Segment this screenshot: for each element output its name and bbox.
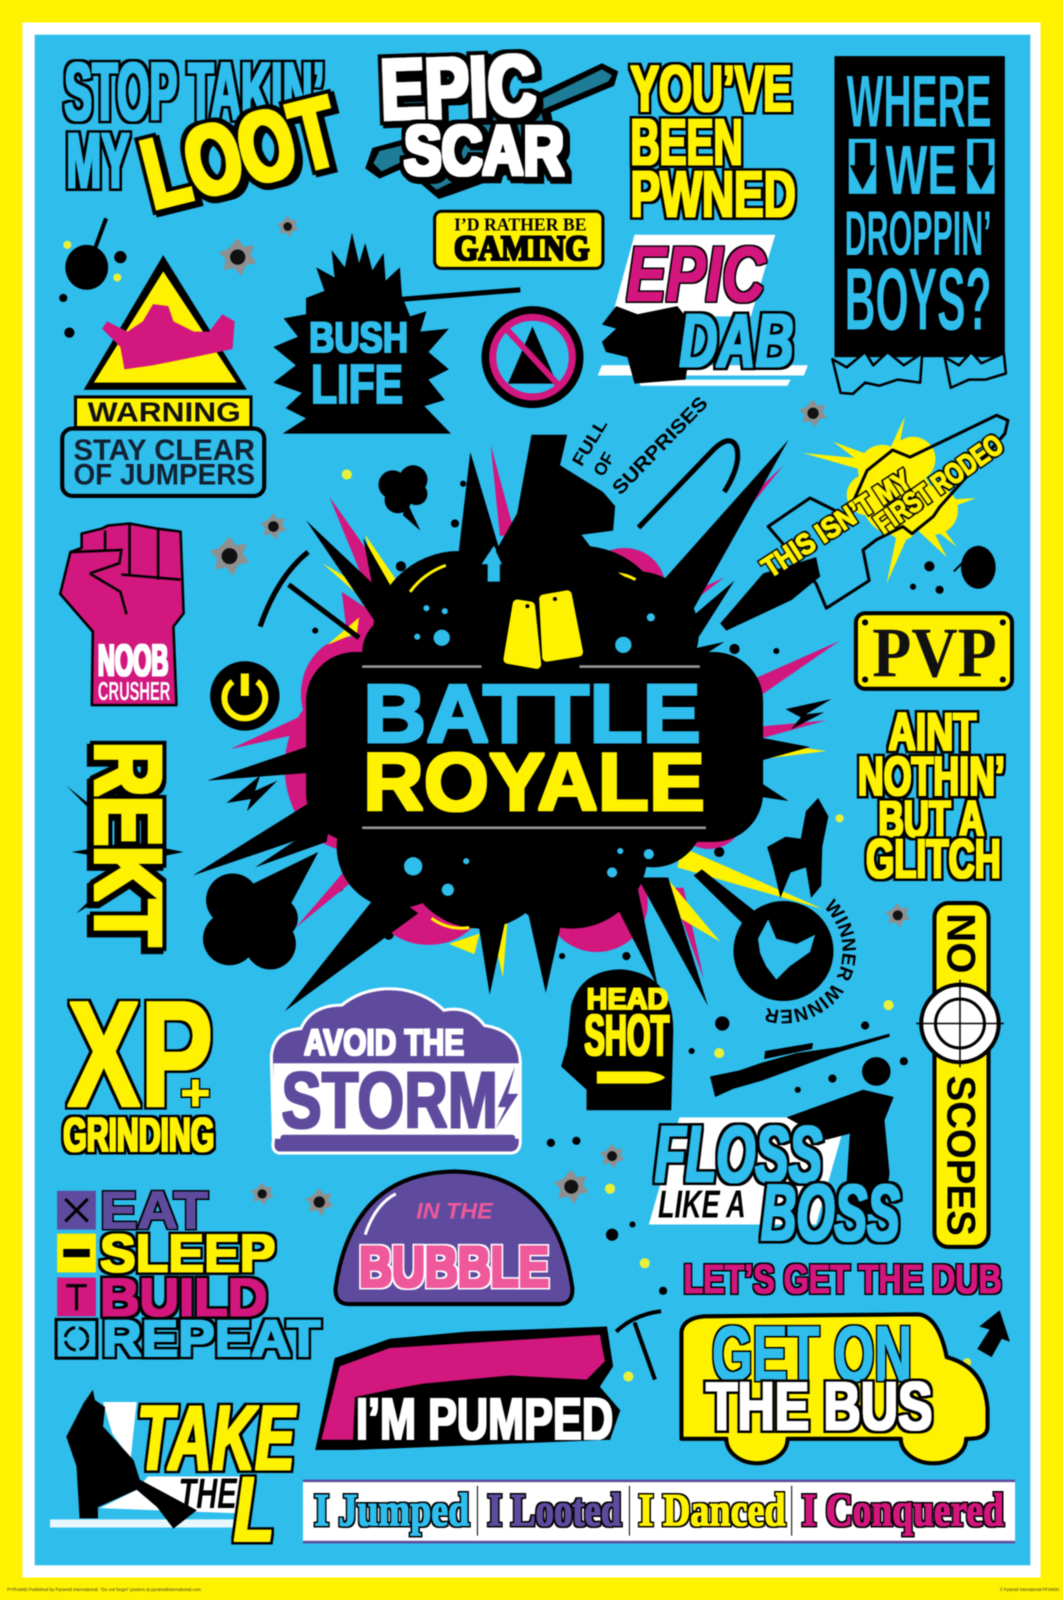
yellow rays xyxy=(322,535,826,978)
text: FULL: FULL xyxy=(568,415,611,469)
yellow splash xyxy=(803,416,976,584)
black cloud xyxy=(306,546,763,929)
warning label xyxy=(75,397,251,428)
winner winner arc path xyxy=(765,907,843,1010)
icon: sniper rifle xyxy=(710,1034,890,1097)
i'm pumped xyxy=(315,1327,620,1452)
rekt xyxy=(66,742,184,946)
purple rule top xyxy=(303,1480,1015,1482)
row: build: BUILD xyxy=(100,1268,267,1327)
text: LIKE A: LIKE A xyxy=(658,1183,746,1226)
icon: flossing silhouette xyxy=(787,1057,894,1214)
text: CRUSHER: CRUSHER xyxy=(98,678,170,706)
icon: scar rifle xyxy=(365,63,618,199)
title rule bottom xyxy=(362,827,706,829)
text: FIRST RODEO: FIRST RODEO xyxy=(869,429,1009,540)
white backdrop xyxy=(649,1117,847,1224)
sign: pvp xyxy=(856,613,1012,693)
text: SCAR: SCAR xyxy=(404,111,564,189)
text: I Jumped: I Jumped xyxy=(314,1485,469,1537)
purple rule bottom xyxy=(303,1541,1015,1543)
handle xyxy=(694,869,755,923)
icon: skydiver xyxy=(102,304,235,369)
central explosion xyxy=(193,440,840,1011)
text: HEAD: HEAD xyxy=(587,983,668,1016)
icon: jumpers xyxy=(832,352,1006,394)
icon: grenade xyxy=(954,546,996,589)
text: IN THE: IN THE xyxy=(416,1198,494,1223)
warning triangle xyxy=(84,255,247,390)
row: sleep: SLEEP xyxy=(100,1224,275,1283)
white backdrop xyxy=(103,1402,137,1459)
icon: no tent sign xyxy=(482,306,584,408)
warning sign: stay clear of jumpers xyxy=(62,255,264,496)
text: STORM: STORM xyxy=(282,1056,498,1145)
text: I'M PUMPED: I’M PUMPED xyxy=(356,1387,613,1452)
yellow arcs xyxy=(410,565,636,928)
text: I Conquered: I Conquered xyxy=(802,1485,1004,1537)
text: LOOT: LOOT xyxy=(131,75,348,230)
text: full of surprises xyxy=(568,392,712,499)
text: +: + xyxy=(181,1064,210,1121)
strip: i jumped i looted i danced i conquered xyxy=(303,1480,1015,1543)
text: SCOPES: SCOPES xyxy=(939,1076,983,1236)
text: STOP TAKIN': STOP TAKIN’ xyxy=(64,46,324,137)
icon: bush silhouette xyxy=(273,233,451,434)
icon: pickaxe left xyxy=(260,552,359,638)
icon: crowbar xyxy=(639,441,738,528)
black spikes xyxy=(193,440,810,1011)
no scopes bar xyxy=(916,903,1004,1247)
bush life xyxy=(273,233,520,434)
icon: scope xyxy=(916,980,1004,1067)
text: WINNER WINNER: WINNER WINNER xyxy=(764,898,857,1024)
highlight xyxy=(365,1194,396,1235)
footer small print xyxy=(7,1587,1060,1592)
bar xyxy=(934,903,989,1247)
epic scar sticker xyxy=(365,37,618,199)
headline: stop takin my loot xyxy=(64,46,348,230)
white strip xyxy=(303,1481,1015,1542)
text: THIS ISN'T MY: THIS ISN’T MY xyxy=(757,464,918,584)
icon: arrow lower right xyxy=(977,1310,1010,1357)
icon: pickaxe lower right xyxy=(616,1311,661,1380)
text: publisher: PYRAMID Published by Pyramid International. "Do not forget" posters at pyramidinternational.com xyxy=(7,1587,202,1592)
text: EPIC: EPIC xyxy=(379,37,537,138)
text: GAMING: GAMING xyxy=(454,228,590,268)
icon: up arrow xyxy=(482,546,506,582)
storm cloud xyxy=(271,989,520,1153)
text: LIFE: LIFE xyxy=(311,353,403,415)
pan xyxy=(733,901,833,1001)
title: ROYALE: ROYALE xyxy=(363,737,705,828)
icon: smoke cloud lower left xyxy=(203,852,318,969)
arrow left xyxy=(849,139,876,194)
text: TAKE: TAKE xyxy=(137,1387,297,1489)
xp grinding xyxy=(63,969,214,1161)
text: MY: MY xyxy=(66,119,130,205)
text: BEEN: BEEN xyxy=(630,105,743,178)
caption box xyxy=(62,429,264,496)
icon: lightning xyxy=(496,1066,518,1129)
avoid the storm xyxy=(271,989,520,1153)
white backdrop xyxy=(612,235,775,316)
band xyxy=(281,1135,515,1148)
icon: llama top xyxy=(496,435,632,582)
icon: rifle xyxy=(393,290,520,300)
black ribbon xyxy=(768,415,1008,608)
cyan specks xyxy=(404,605,655,896)
text: AINT: AINT xyxy=(889,703,976,762)
icon: pan with chicken and winner text xyxy=(693,868,857,1024)
headline: you've been pwned xyxy=(630,52,796,230)
sign: i'd rather be gaming xyxy=(435,211,603,268)
text: BUBBLE: BUBBLE xyxy=(359,1236,549,1300)
floss like a boss xyxy=(649,1057,900,1257)
this isn't my first rodeo xyxy=(757,415,1009,608)
strip xyxy=(598,365,808,376)
row: repeat: REPEAT xyxy=(102,1310,320,1367)
panel background xyxy=(834,56,1005,357)
small decorative dots xyxy=(59,241,971,1382)
text: I Danced: I Danced xyxy=(639,1485,786,1537)
bullet holes xyxy=(210,216,910,1216)
icon: dog tags xyxy=(508,595,578,664)
strip lower xyxy=(638,380,791,386)
icon: silhouette xyxy=(66,1390,197,1529)
icon: fist xyxy=(60,523,184,705)
dividers xyxy=(477,1486,792,1536)
text: YOU'VE: YOU’VE xyxy=(630,52,792,125)
row: eat: EAT xyxy=(100,1182,208,1241)
dome xyxy=(336,1171,572,1304)
title rule top xyxy=(362,665,700,668)
text: REKT: REKT xyxy=(76,742,181,946)
text: WE: WE xyxy=(885,131,957,209)
chicken xyxy=(758,919,815,980)
shotgun outline xyxy=(315,1327,620,1450)
text: SHOT: SHOT xyxy=(585,1004,669,1068)
strip xyxy=(50,1519,234,1528)
head shot xyxy=(561,969,673,1110)
icon: power button xyxy=(210,661,280,731)
white backdrop lower xyxy=(100,1477,244,1513)
panel: where we droppin boys xyxy=(832,56,1006,394)
icon: cloud puff top xyxy=(378,465,427,531)
text: NO: NO xyxy=(939,913,983,973)
magenta blast xyxy=(231,445,840,980)
text: L: L xyxy=(234,1459,274,1561)
shotgun body xyxy=(321,1335,605,1440)
text: OF: OF xyxy=(589,449,618,480)
text: GET ON: GET ON xyxy=(712,1312,912,1398)
text: EPIC: EPIC xyxy=(626,232,766,318)
title: BATTLE: BATTLE xyxy=(363,667,701,760)
text: THE: THE xyxy=(179,1470,238,1518)
text: DAB: DAB xyxy=(679,298,794,382)
text: WARNING: WARNING xyxy=(88,396,241,427)
icon: dabbing silhouette xyxy=(602,306,694,384)
row: eat xyxy=(57,1182,208,1241)
text: NOOB: NOOB xyxy=(98,635,168,686)
headline: aint nothin but a glitch xyxy=(858,703,1005,890)
text: BOSS: BOSS xyxy=(761,1168,900,1257)
icon: rocket trail xyxy=(720,557,820,631)
text: FLOSS: FLOSS xyxy=(655,1110,822,1199)
arrow right xyxy=(967,139,995,194)
eat sleep build repeat xyxy=(56,1182,320,1367)
icon: head silhouette xyxy=(561,969,673,1110)
text: PVP: PVP xyxy=(872,614,997,693)
text: copyright: © Pyramid International PP34000 xyxy=(1000,1587,1060,1592)
text: BUSH: BUSH xyxy=(309,314,408,362)
icon: bullet xyxy=(597,1071,665,1084)
plate xyxy=(856,613,1012,689)
rivets xyxy=(862,619,1006,683)
text: STAY CLEAR: STAY CLEAR xyxy=(73,434,255,467)
icon: bus xyxy=(681,1314,988,1463)
epic dab xyxy=(598,232,808,386)
get on the bus xyxy=(681,1312,988,1463)
text: GRINDING: GRINDING xyxy=(63,1109,214,1161)
text: AVOID THE: AVOID THE xyxy=(304,1022,464,1063)
sign plate xyxy=(435,211,603,268)
icon: frying pan xyxy=(65,218,108,290)
text: BUT A: BUT A xyxy=(878,791,984,848)
text: OF JUMPERS: OF JUMPERS xyxy=(73,459,255,492)
text: I'D RATHER BE: I’D RATHER BE xyxy=(454,215,587,235)
text: THE BUS: THE BUS xyxy=(706,1370,932,1445)
text: I Looted: I Looted xyxy=(488,1485,621,1537)
white band xyxy=(273,1063,520,1139)
text: XP: XP xyxy=(67,969,213,1138)
noob crusher fist xyxy=(60,523,184,706)
spikes xyxy=(66,786,184,913)
in the bubble xyxy=(336,1171,572,1304)
icon: small llama xyxy=(767,798,828,898)
take the l xyxy=(50,1387,297,1561)
triangle yellow inner xyxy=(94,271,237,383)
icon: lightning bolts xyxy=(226,699,831,811)
text: PWNED: PWNED xyxy=(630,157,796,230)
text: SURPRISES: SURPRISES xyxy=(608,392,712,499)
